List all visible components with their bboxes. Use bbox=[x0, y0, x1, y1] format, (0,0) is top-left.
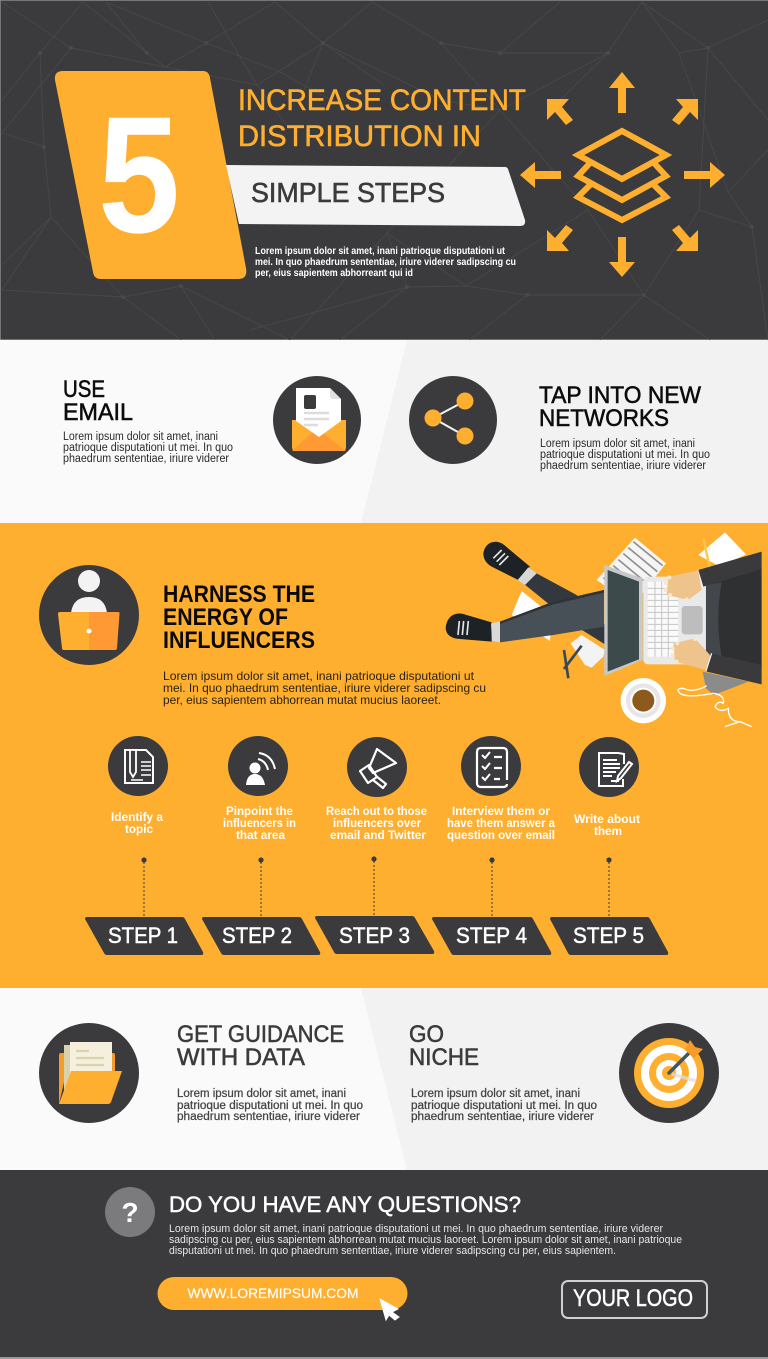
panel: header bbox=[0, 0, 768, 340]
heading: tap into new networks: NETWORKS bbox=[539, 405, 669, 432]
heading: go niche: NICHE bbox=[409, 1044, 479, 1071]
heading: go niche: GO bbox=[409, 1021, 444, 1048]
text: reach out: Reach out to those bbox=[326, 804, 427, 818]
text block: go niche bbox=[411, 1088, 597, 1123]
panel: influencers bbox=[0, 523, 768, 988]
badge: number 5: 5 bbox=[98, 83, 180, 268]
heading: get guidance with data bbox=[177, 1021, 344, 1071]
text: reach out bbox=[326, 804, 427, 842]
text: write about them: Write about bbox=[574, 812, 640, 826]
text: interview: Interview them or bbox=[452, 804, 550, 818]
step 4 bbox=[432, 736, 555, 955]
text: identify a topic: Identify a bbox=[111, 810, 163, 824]
text block: get guidance: Lorem ipsum dolor sit amet, inani bbox=[177, 1088, 346, 1100]
text: identify a topic bbox=[111, 810, 163, 836]
heading: questions: DO YOU HAVE ANY QUESTIONS? bbox=[169, 1192, 521, 1217]
banner: simple steps bbox=[226, 165, 525, 226]
heading: harness the energy of influencers: INFLUENCERS bbox=[163, 627, 315, 654]
text: interview: question over email bbox=[447, 828, 555, 842]
icon: person broadcasting bbox=[228, 736, 288, 796]
text block: get guidance: patrioque disputationi ut mei. In quo bbox=[177, 1100, 363, 1112]
label: step 2: STEP 2 bbox=[222, 923, 292, 948]
text block: header intro: per, eius sapientem abhorreant qui id bbox=[255, 268, 413, 279]
text: reach out: influencers over bbox=[333, 816, 421, 830]
logo: YOUR LOGO bbox=[573, 1285, 693, 1312]
text: pinpoint the influencers bbox=[223, 804, 296, 842]
text block: go niche: phaedrum sententiae, iriure viderer bbox=[411, 1111, 594, 1123]
text block: go niche: patrioque disputationi ut mei. In quo bbox=[411, 1100, 597, 1112]
label: step 3 bbox=[315, 916, 434, 954]
label: step 4: STEP 4 bbox=[456, 923, 527, 948]
step 3 bbox=[315, 737, 434, 954]
heading: tap into new networks bbox=[539, 382, 701, 432]
heading: go niche bbox=[409, 1021, 479, 1071]
heading: use email bbox=[63, 376, 133, 426]
label: step 5 bbox=[550, 917, 668, 955]
icon: target bbox=[619, 1023, 719, 1123]
text: pinpoint the influencers: Pinpoint the bbox=[226, 804, 293, 818]
icon: person with laptop bbox=[39, 565, 139, 665]
heading: use email: EMAIL bbox=[63, 399, 133, 426]
icon: share bbox=[409, 376, 497, 464]
badge: number 5 bbox=[55, 71, 246, 279]
title bbox=[238, 84, 526, 153]
panel: footer bbox=[0, 1170, 768, 1359]
icon: layers with arrows bbox=[520, 72, 725, 277]
button: website: WWW.LOREMIPSUM.COM bbox=[188, 1285, 358, 1301]
connector bbox=[141, 857, 147, 917]
text block: tap into new networks bbox=[540, 438, 710, 472]
text: reach out: email and Twitter bbox=[330, 828, 426, 842]
label: step 1 bbox=[85, 917, 203, 955]
connector bbox=[258, 857, 264, 917]
text block: get guidance: phaedrum sententiae, iriure viderer bbox=[177, 1111, 360, 1123]
illustration: person on laptop bbox=[446, 532, 762, 727]
icon: document and pen bbox=[579, 737, 639, 797]
text: interview: have them answer a bbox=[447, 816, 555, 830]
icon: document with pencil bbox=[108, 736, 168, 796]
panel: data and niche bbox=[0, 988, 768, 1170]
text: write about them: them bbox=[594, 824, 622, 838]
icon: email bbox=[273, 376, 361, 464]
banner: simple steps: SIMPLE STEPS bbox=[251, 177, 445, 208]
step 1 bbox=[85, 736, 203, 955]
icon: folder bbox=[39, 1023, 139, 1123]
icon: megaphone bbox=[347, 737, 407, 797]
text block: influencers: mei. In quo phaedrum sententiae, iriure viderer sadipscing cu bbox=[163, 681, 486, 695]
text block: use email bbox=[63, 431, 233, 465]
text block: tap into new networks: patrioque disputationi ut mei. In quo bbox=[540, 449, 710, 461]
heading: get guidance with data: WITH DATA bbox=[177, 1044, 305, 1071]
title: DISTRIBUTION IN bbox=[238, 120, 481, 153]
text block: go niche: Lorem ipsum dolor sit amet, inani bbox=[411, 1088, 580, 1100]
text block: footer: disputationi ut mei. In quo phaedrum sententiae, iriure viderer sadipscing cu per, eius sapientem. bbox=[169, 1245, 616, 1257]
text block: influencers bbox=[163, 669, 486, 707]
label: step 4 bbox=[432, 917, 551, 955]
connector bbox=[489, 857, 495, 917]
text block: use email: Lorem ipsum dolor sit amet, inani bbox=[63, 431, 218, 443]
text block: header intro: mei. In quo phaedrum sententiae, iriure viderer sadipscing cu bbox=[255, 257, 516, 268]
text: pinpoint the influencers: that area bbox=[236, 828, 285, 842]
text block: use email: patrioque disputationi ut mei. In quo bbox=[63, 442, 233, 454]
button: website bbox=[158, 1277, 408, 1310]
text block: header intro: Lorem ipsum dolor sit amet, inani patrioque disputationi ut bbox=[255, 246, 506, 257]
text block: header intro bbox=[255, 246, 516, 279]
title: INCREASE CONTENT bbox=[238, 84, 526, 117]
text block: tap into new networks: Lorem ipsum dolor sit amet, inani bbox=[540, 438, 695, 450]
text block: influencers: Lorem ipsum dolor sit amet, inani patrioque disputationi ut bbox=[163, 669, 475, 683]
label: step 5: STEP 5 bbox=[573, 923, 644, 948]
heading: harness the energy of influencers bbox=[163, 581, 315, 654]
text: interview bbox=[447, 804, 555, 842]
text block: influencers: per, eius sapientem abhorrean mutat mucius laoreet. bbox=[163, 693, 441, 707]
step 5 bbox=[550, 737, 668, 955]
text block: use email: phaedrum sententiae, iriure viderer bbox=[63, 453, 229, 465]
heading: harness the energy of influencers: ENERGY OF bbox=[163, 604, 288, 631]
icon: cursor bbox=[380, 1299, 399, 1320]
text block: get guidance bbox=[177, 1088, 363, 1123]
step 2 bbox=[202, 736, 320, 955]
connector bbox=[606, 857, 612, 917]
icon: question mark bbox=[105, 1187, 155, 1237]
heading: use email: USE bbox=[63, 376, 105, 403]
text block: footer: sadipscing cu per, eius sapientem abhorrean mutat mucius laoreet. Lorem ipsum dolor sit amet, inani patrioque bbox=[169, 1234, 682, 1246]
text: identify a topic: topic bbox=[125, 822, 153, 836]
connector bbox=[371, 856, 377, 916]
text block: footer: Lorem ipsum dolor sit amet, inani patrioque disputationi ut mei. In quo phaedrum sententiae, iriure viderer bbox=[169, 1223, 663, 1235]
text block: footer bbox=[169, 1223, 682, 1257]
icon: question mark: ? bbox=[121, 1197, 139, 1228]
panel: email and networks bbox=[0, 340, 768, 523]
label: step 1: STEP 1 bbox=[108, 923, 178, 948]
text block: tap into new networks: phaedrum sententiae, iriure viderer bbox=[540, 460, 706, 472]
heading: get guidance with data: GET GUIDANCE bbox=[177, 1021, 344, 1048]
icon: checklist bbox=[461, 736, 521, 796]
heading: harness the energy of influencers: HARNESS THE bbox=[163, 581, 315, 608]
text: write about them bbox=[574, 812, 640, 838]
logo bbox=[562, 1281, 707, 1318]
label: step 2 bbox=[202, 917, 320, 955]
label: step 3: STEP 3 bbox=[339, 923, 410, 948]
heading: tap into new networks: TAP INTO NEW bbox=[539, 382, 701, 409]
text: pinpoint the influencers: influencers in bbox=[223, 816, 296, 830]
